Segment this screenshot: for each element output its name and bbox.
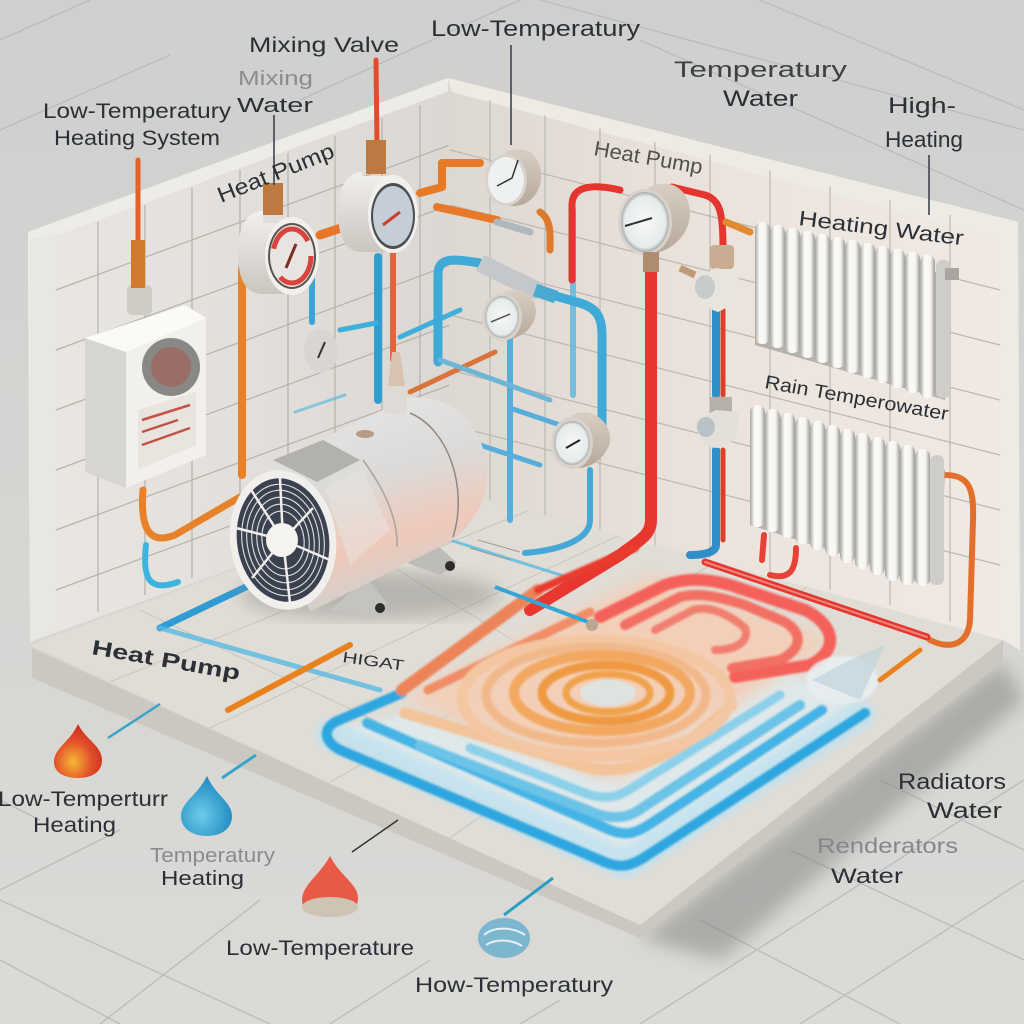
- label: heat pump on left wall: Heat Pump: [214, 138, 338, 208]
- floor pipes: [160, 540, 570, 710]
- label: heating water: Heating Water: [797, 207, 965, 250]
- pipes: left wall: [138, 60, 550, 585]
- pipes: right wall: [438, 187, 973, 645]
- top valve: [383, 386, 407, 414]
- floor blue feed pipe: [495, 587, 598, 631]
- label: low-temperature heating system: Low-Temperatury: [43, 100, 232, 123]
- label: temperatury heating: [150, 845, 275, 890]
- label: low-temperature heating left: [0, 788, 168, 837]
- label: low-temperature heating system: [43, 100, 232, 150]
- label: mixing valve: Mixing Valve: [249, 34, 399, 57]
- radiator: lower: [750, 405, 945, 586]
- feet: [330, 578, 387, 617]
- gauge lower: [572, 412, 610, 468]
- manifold detail: [806, 645, 920, 704]
- gauge: left large: [238, 183, 319, 295]
- gauge top right: [645, 184, 690, 254]
- valve right lower: [710, 397, 732, 413]
- label: renderators water: [817, 835, 958, 888]
- cylinder: [258, 397, 487, 612]
- label: temperature water: Temperatury: [674, 57, 847, 82]
- label: low-temperature heating left: Low-Temperturr: [0, 788, 168, 811]
- label: low-temperature bottom: Low-Temperature: [226, 937, 414, 960]
- label: low-temperature heating left: Heating: [33, 814, 116, 837]
- gauge left small: [304, 329, 338, 373]
- label: renderators water: Renderators: [817, 835, 958, 858]
- icon: red drop 1: [54, 704, 160, 778]
- small gauges: [304, 149, 739, 469]
- label: low-temperature heating system: Heating System: [54, 127, 220, 150]
- right wall: [448, 78, 1020, 650]
- radiator: upper: [755, 222, 959, 400]
- label: mixing water: Mixing: [238, 68, 313, 90]
- label: temperature water: [674, 57, 847, 111]
- gauge mid: [502, 290, 536, 340]
- label: high-heating: Heating: [885, 127, 963, 152]
- label: high-heating: [885, 93, 963, 152]
- label: heat pump on floor: Heat Pump: [90, 636, 242, 685]
- label: heat pump on right wall: Heat Pump: [592, 137, 704, 179]
- underfloor heating coil: [327, 548, 865, 866]
- heat pump: [221, 352, 500, 619]
- fan: [221, 463, 345, 617]
- leader lines: [274, 45, 929, 215]
- left wall: [28, 78, 452, 642]
- label: mixing water: [237, 68, 313, 117]
- gauge top middle: [506, 149, 541, 206]
- valve right upper: [710, 245, 734, 269]
- icon: blue drop: [181, 755, 256, 836]
- mixing valve fitting: [480, 263, 556, 297]
- shadow: [240, 571, 500, 619]
- label: radiators water: [898, 769, 1006, 823]
- label: renderators water: Water: [831, 865, 903, 888]
- label: temperatury heating: Temperatury: [150, 845, 275, 867]
- label: radiators water: Radiators: [898, 769, 1006, 794]
- label: mixing water: Water: [237, 95, 313, 117]
- label: high-heating: High-: [888, 93, 956, 118]
- gauge: centre large: [338, 140, 418, 253]
- platform: [30, 490, 1024, 960]
- icon: red drop 2: [302, 820, 398, 917]
- label: low-temperature top: Low-Temperatury: [431, 16, 640, 41]
- label: high on floor: HIGAT: [341, 649, 405, 675]
- label: how-temperatury: How-Temperatury: [415, 974, 614, 997]
- base under coil: [330, 670, 865, 865]
- label: rain temperature water: Rain Temperowater: [763, 372, 951, 425]
- control box: [85, 240, 206, 488]
- heat pump floor marking: [470, 540, 520, 560]
- label: temperatury heating: Heating: [161, 868, 244, 890]
- label: temperature water: Water: [723, 86, 798, 111]
- label: radiators water: Water: [927, 798, 1002, 823]
- icon: blue stone: [478, 878, 553, 958]
